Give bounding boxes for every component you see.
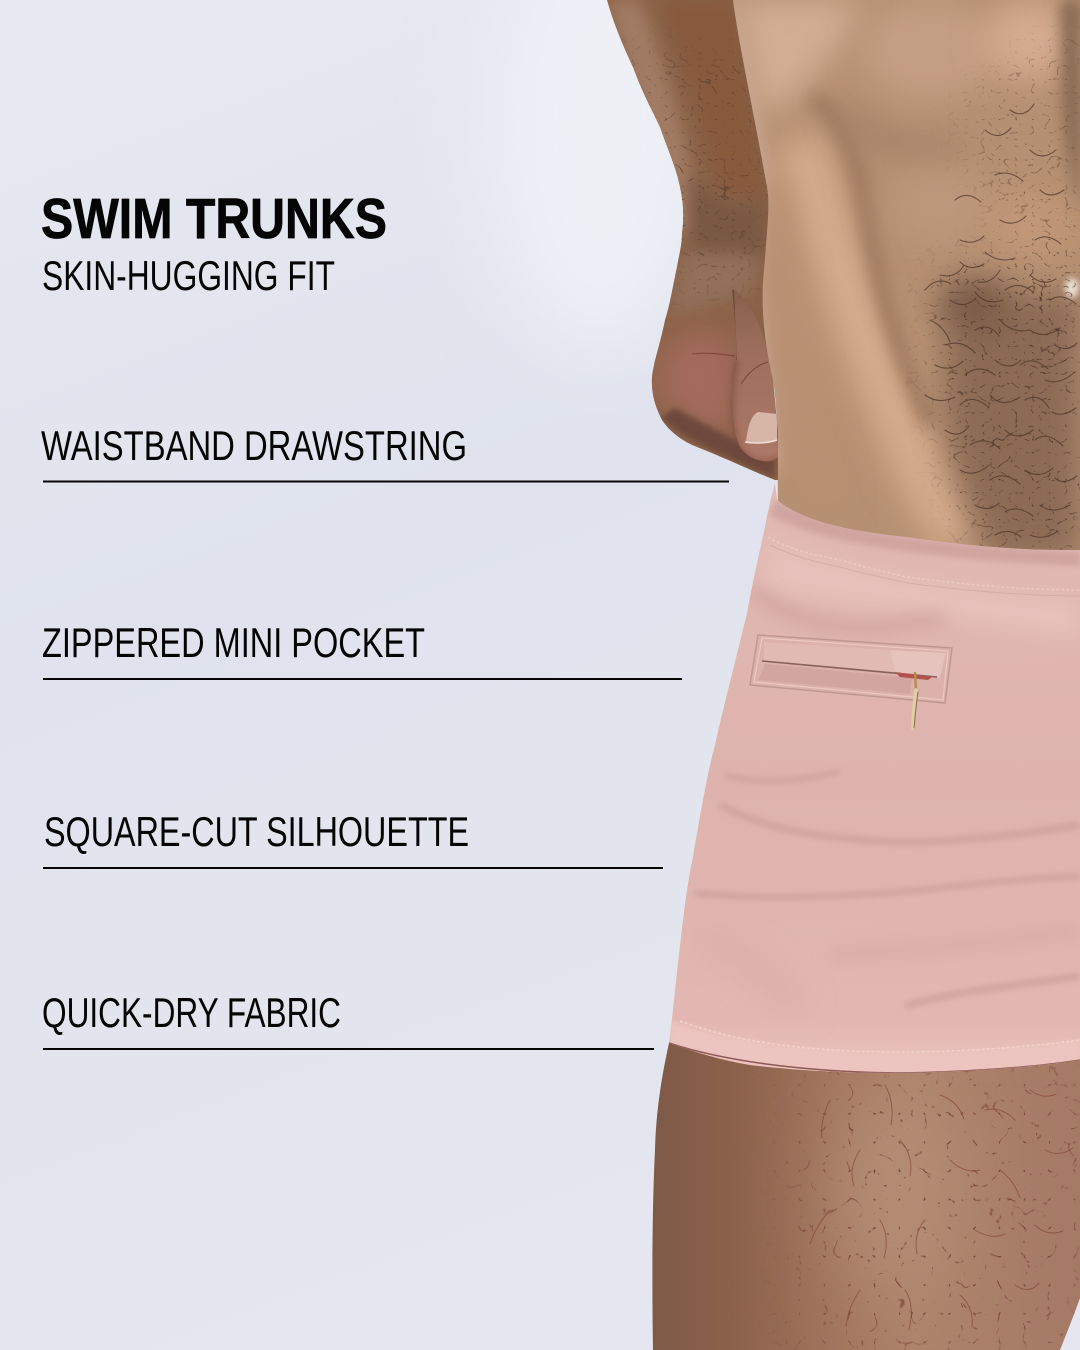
- hand-drawn hair strands: [925, 104, 1077, 537]
- torso highlights and muscle shading: [730, 0, 1080, 560]
- swim trunks: [660, 480, 1080, 1080]
- feature: zippered mini pocket: ZIPPERED MINI POCKET: [42, 619, 425, 666]
- zippered pocket: [750, 635, 952, 728]
- waistband stitching: [768, 537, 1080, 596]
- feature: waistband drawstring: WAISTBAND DRAWSTRING: [41, 422, 467, 469]
- fabric folds: [695, 590, 1080, 1010]
- arm and hand: [607, 0, 778, 480]
- torso: [733, 0, 1080, 550]
- leg hair: [790, 1060, 1080, 1350]
- chest and belly hair: [929, 20, 1080, 570]
- zipper pull: [913, 673, 918, 728]
- leg: [645, 1035, 1080, 1350]
- feature: square-cut silhouette: SQUARE-CUT SILHOUETTE: [44, 808, 469, 855]
- subtitle: SKIN-HUGGING FIT: [42, 252, 335, 299]
- arm shading: [607, 0, 765, 315]
- fist: [655, 290, 775, 478]
- hand-drawn leg hair strands: [810, 1085, 1073, 1330]
- title: SWIM TRUNKS: [41, 187, 387, 251]
- feature: quick-dry fabric: QUICK-DRY FABRIC: [42, 989, 341, 1036]
- hem: [669, 1020, 1080, 1073]
- arm hair: [610, 50, 760, 290]
- thumb: [733, 290, 778, 461]
